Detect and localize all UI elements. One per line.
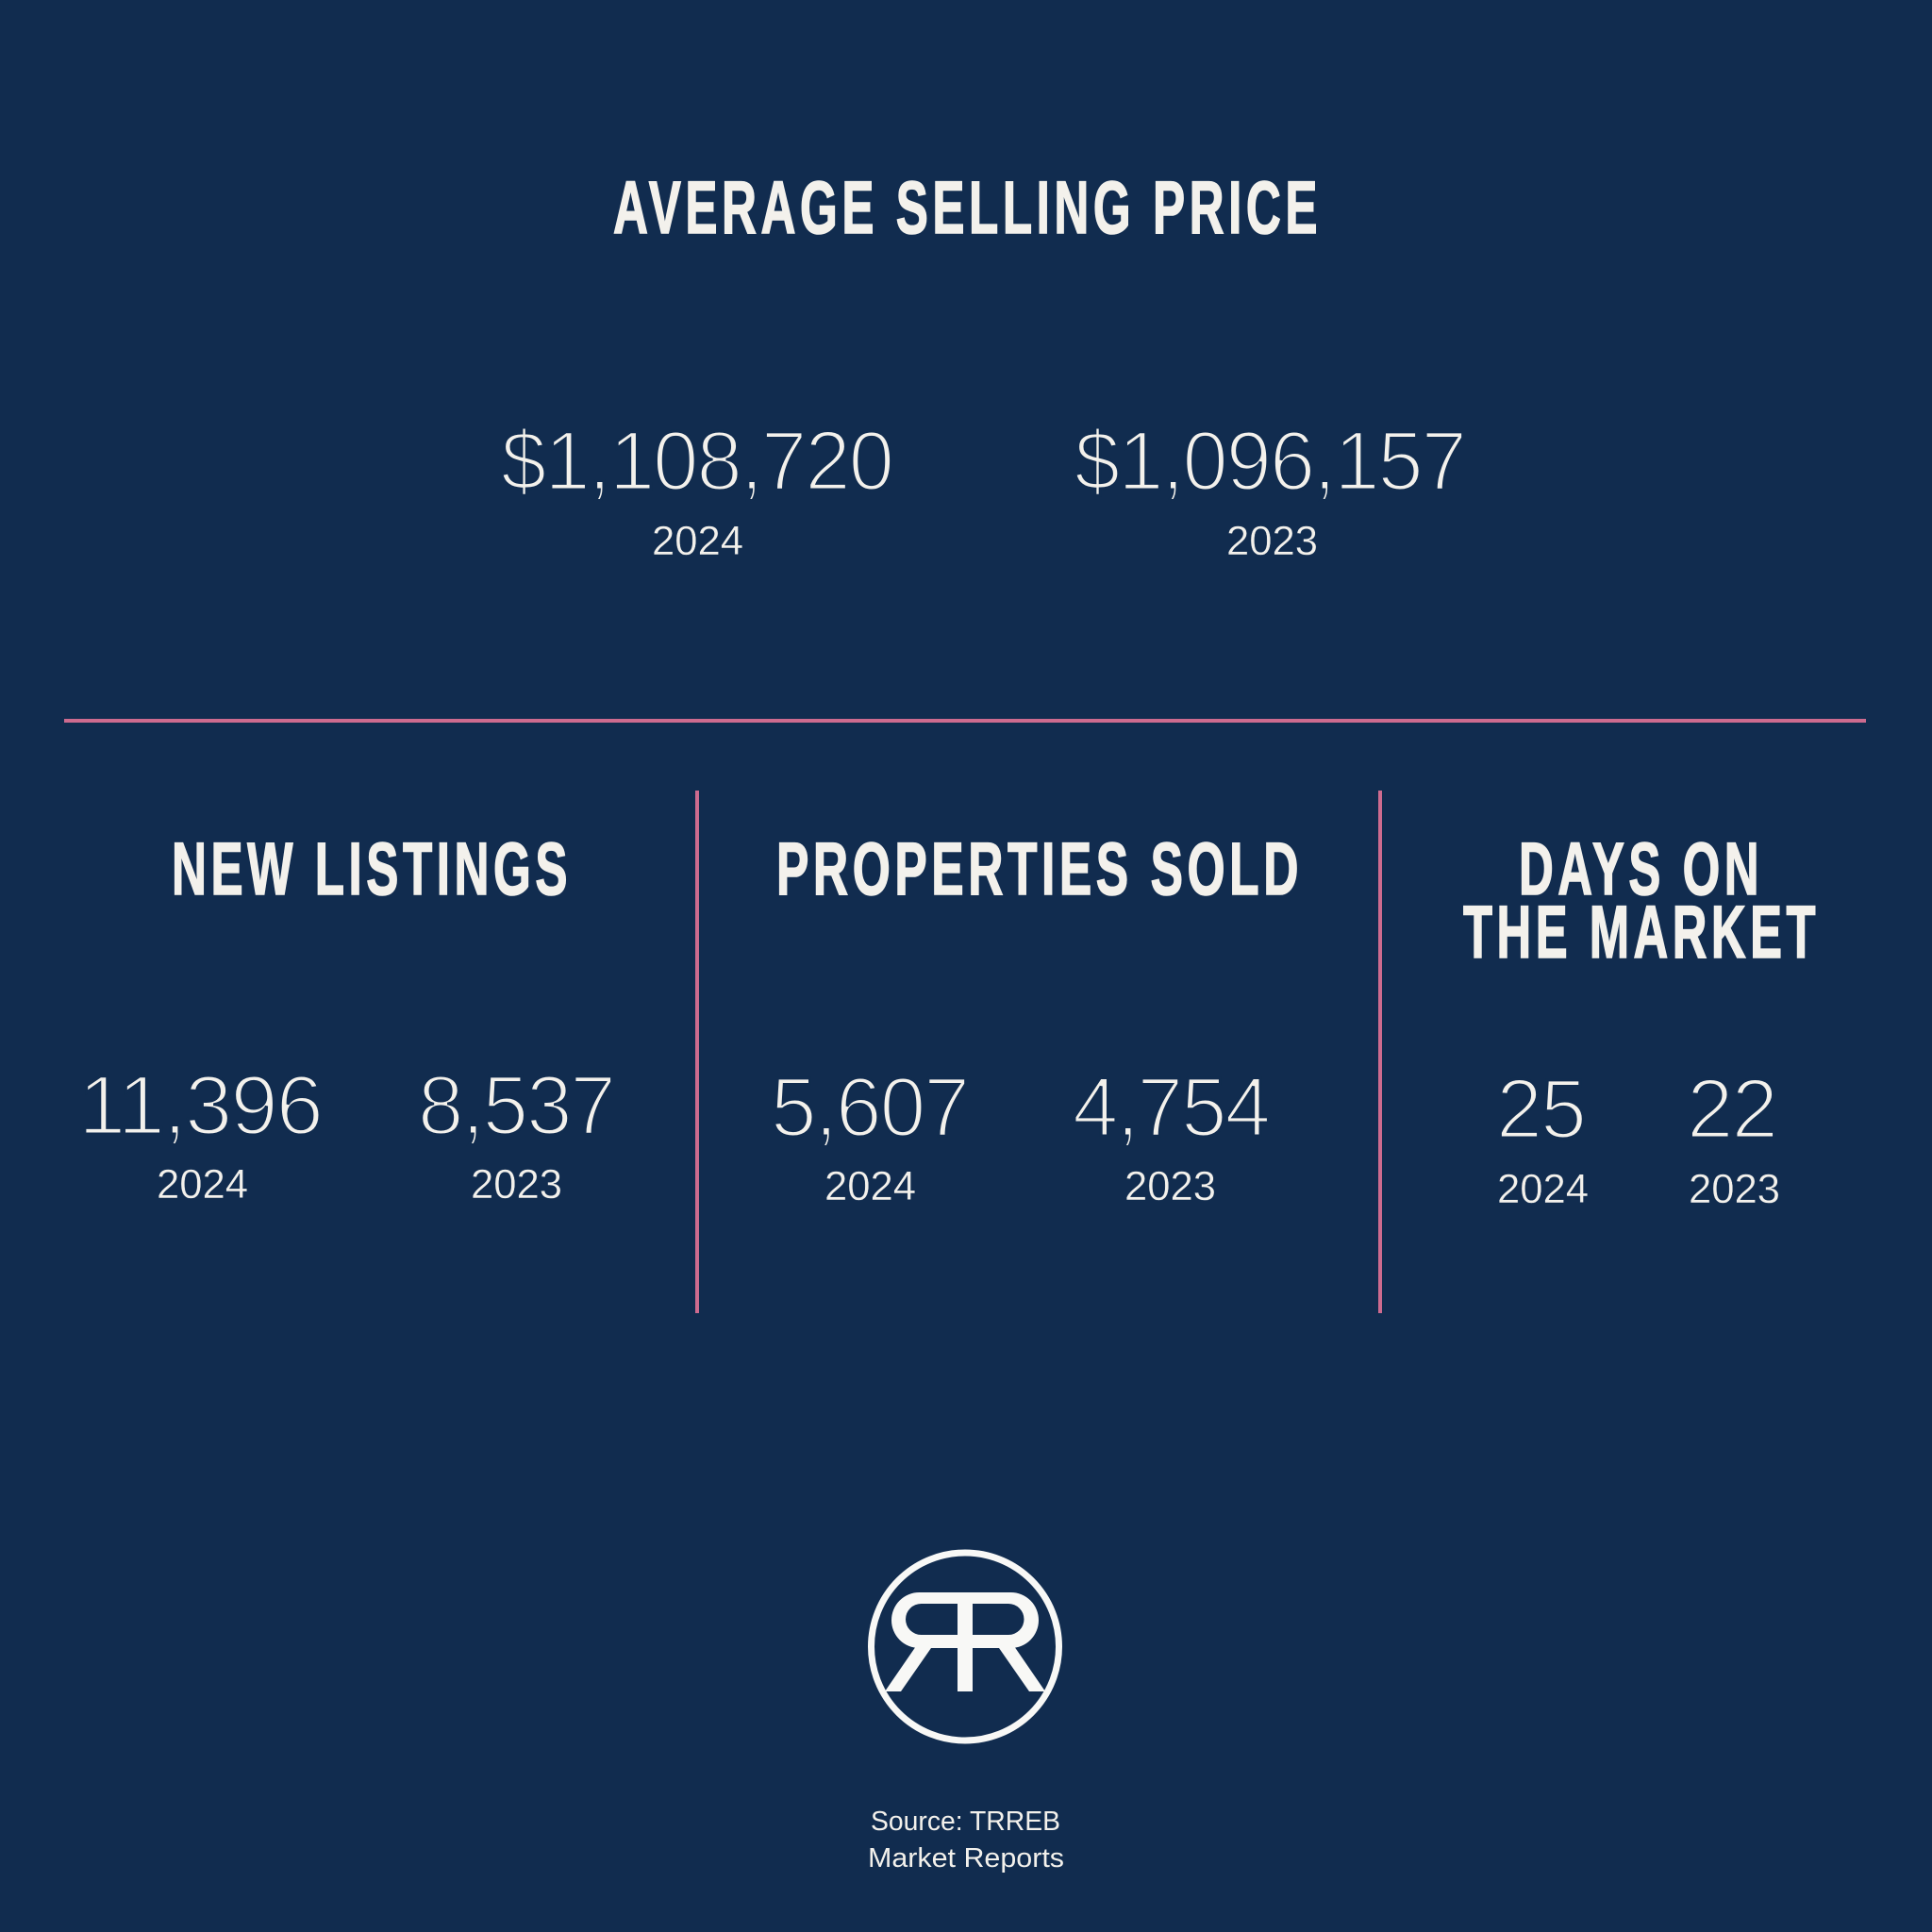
label: 2023: 2023 bbox=[1226, 518, 1318, 564]
label: 2024: 2024 bbox=[652, 518, 743, 564]
source note bbox=[868, 1807, 1064, 1874]
panel: properties sold bbox=[771, 826, 1303, 1209]
value: 2024 new listings: 11,396 bbox=[78, 1058, 322, 1152]
value: 2023 days on market: 22 bbox=[1687, 1061, 1776, 1156]
heading: properties sold: PROPERTIES SOLD bbox=[776, 826, 1303, 910]
heading: average selling price: AVERAGE SELLING PRICE bbox=[613, 165, 1322, 249]
label: 2024: 2024 bbox=[1497, 1166, 1589, 1212]
panel: new listings bbox=[78, 826, 614, 1208]
label: 2023: 2023 bbox=[471, 1161, 562, 1208]
panel: days on the market bbox=[1463, 826, 1820, 1212]
source note: Market Reports bbox=[868, 1843, 1064, 1874]
value: 2023 new listings: 8,537 bbox=[418, 1058, 614, 1152]
heading: new listings: NEW LISTINGS bbox=[172, 826, 572, 910]
value: 2023 properties sold: 4,754 bbox=[1073, 1059, 1269, 1154]
source note: Source: TRREB bbox=[871, 1807, 1060, 1837]
heading: days on the market bbox=[1463, 826, 1820, 974]
value: 2024 properties sold: 5,607 bbox=[771, 1059, 968, 1154]
label: 2023: 2023 bbox=[1689, 1166, 1780, 1212]
label: 2024: 2024 bbox=[824, 1163, 916, 1209]
label: 2023: 2023 bbox=[1124, 1163, 1216, 1209]
value: 2024 days on market: 25 bbox=[1496, 1061, 1585, 1156]
panel: average selling price bbox=[501, 165, 1465, 564]
icon: RR monogram logo bbox=[872, 1553, 1058, 1740]
heading: days on the market: DAYS ON bbox=[1519, 826, 1763, 910]
label: 2024: 2024 bbox=[157, 1161, 248, 1208]
value: 2023 average price: $1,096,157 bbox=[1074, 413, 1465, 508]
value: 2024 average price: $1,108,720 bbox=[501, 413, 892, 508]
